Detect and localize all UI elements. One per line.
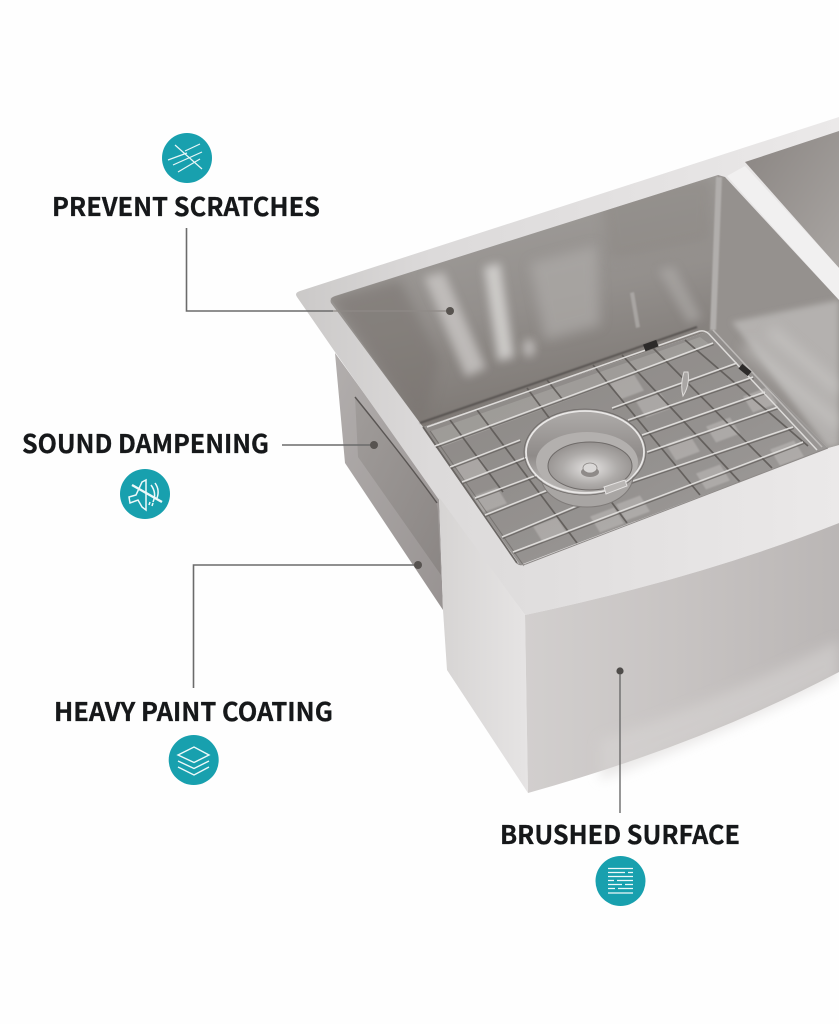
infographic canvas [22,117,839,906]
heading: brushed surface: BRUSHED SURFACE [500,815,740,852]
left bowl back wall [330,175,722,427]
callout: prevent scratches [52,133,454,315]
drain grid wires [427,330,822,552]
apron highlights [600,640,839,780]
bowl front edge [517,448,828,565]
apron side face [439,497,528,793]
sink deck [296,117,839,615]
icon: sound dampening [120,469,170,519]
divider highlight [727,166,839,300]
left bowl floor [423,330,828,565]
grid clips [643,340,752,376]
sink illustration [296,117,839,793]
icon: brushed surface [596,856,646,906]
wire shadows [436,345,804,554]
callout: brushed surface [500,667,740,906]
leader line: brushed surface [616,667,624,813]
leader line: sound dampening [282,441,378,449]
callout: heavy paint coating [54,561,422,785]
apron front face [525,523,839,793]
left bowl right wall and floor [712,175,839,448]
sound dampening pad [355,397,441,575]
leader line: heavy paint coating [194,561,422,688]
heading: heavy paint coating: HEAVY PAINT COATING [54,692,333,729]
heading: sound dampening: SOUND DAMPENING [22,424,269,461]
back band under rear wire [431,337,712,447]
icon: prevent scratches [162,133,212,183]
drain basket [524,409,646,507]
floor tile highlights [455,374,804,542]
icon: heavy paint coating [169,735,219,785]
callout: sound dampening [22,424,378,519]
wall to floor junction [420,327,697,423]
suction hook [682,372,688,396]
heading: prevent scratches: PREVENT SCRATCHES [52,187,320,224]
sink outer body side [335,353,443,610]
right bowl [745,131,839,268]
drain grid shadows [423,340,808,566]
leader line: prevent scratches [186,228,454,315]
wall corner crease [710,177,722,330]
